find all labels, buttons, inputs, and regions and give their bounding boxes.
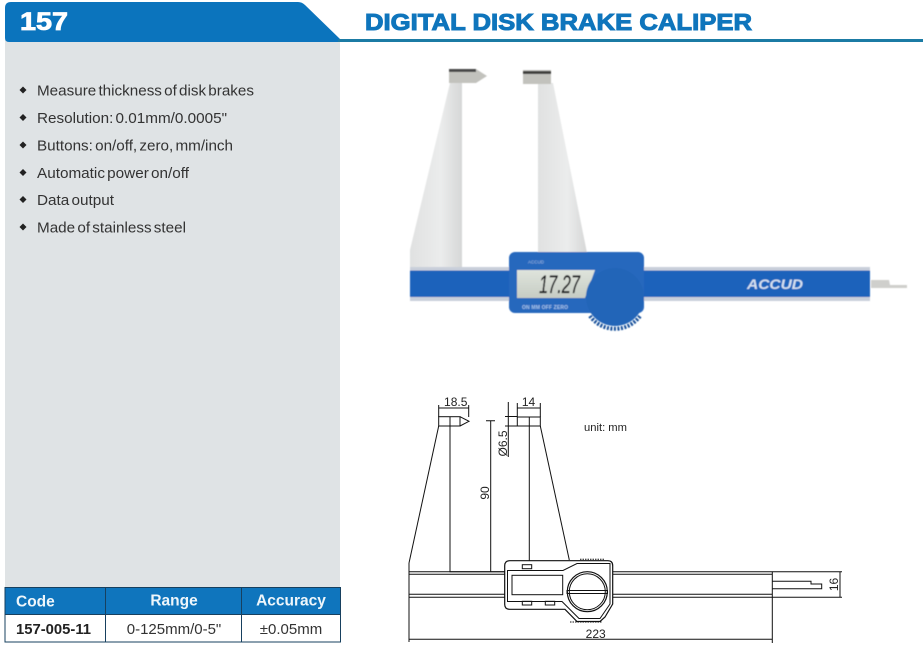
table header row: Accuracy [256, 592, 326, 610]
display housing [509, 252, 644, 313]
table header row: Range [150, 592, 198, 610]
main beam [410, 267, 907, 301]
bullet: measure thickness: Measure thickness of disk brakes [37, 82, 254, 100]
caliper body outline [505, 559, 613, 622]
dimension 18.5: 18.5 [444, 395, 468, 409]
bullet: automatic power: Automatic power on/off [37, 165, 190, 182]
table data row [5, 614, 340, 642]
dimension 18.5 [439, 395, 469, 417]
header rule [338, 39, 923, 42]
dimension 16: 16 [827, 578, 841, 591]
left feature panel background [5, 40, 340, 588]
table header row [5, 588, 340, 614]
dimension 14 [517, 395, 540, 417]
unit label: unit: mm [584, 422, 627, 434]
table data row: 157-005-11 [16, 622, 91, 638]
header tab: product number: 157 [20, 8, 68, 36]
wordmark on beam: ACCUD [746, 276, 803, 292]
right jaw [523, 70, 587, 253]
dimension 14: 14 [522, 395, 535, 409]
technical drawing [409, 395, 842, 643]
dimension diameter 6.5: Ø6.5 [496, 430, 510, 457]
dimension 223: 223 [586, 627, 606, 641]
table data row: 0-125mm/0-5" [127, 621, 221, 638]
bullet: buttons: Buttons: on/off, zero, mm/inch [37, 138, 233, 154]
product photo: digital caliper [410, 69, 907, 329]
display housing: ON MM OFF ZERO [522, 305, 568, 311]
table data row: ±0.05mm [260, 621, 322, 638]
bullet: resolution: Resolution: 0.01mm/0.0005" [37, 110, 227, 127]
feature list [20, 82, 254, 236]
dimension diameter 6.5 [496, 402, 517, 457]
left jaw [410, 69, 487, 268]
table header row: Code [16, 594, 55, 610]
dimension 90: 90 [478, 486, 492, 500]
bullet: data output: Data output [37, 192, 115, 209]
dimension 16 [772, 572, 842, 597]
dimension 90 [478, 421, 495, 572]
bullet: stainless steel: Made of stainless steel [37, 220, 186, 236]
specification table [5, 588, 340, 642]
display housing: 17.27 [539, 271, 581, 299]
left jaw outline [409, 417, 505, 572]
beam outline [409, 563, 822, 643]
thumb wheel [586, 268, 644, 329]
right jaw outline [517, 417, 569, 561]
display housing: ACCUD [528, 260, 545, 264]
title: product name: DIGITAL DISK BRAKE CALIPER [365, 9, 752, 35]
header tab: product number [5, 2, 340, 42]
